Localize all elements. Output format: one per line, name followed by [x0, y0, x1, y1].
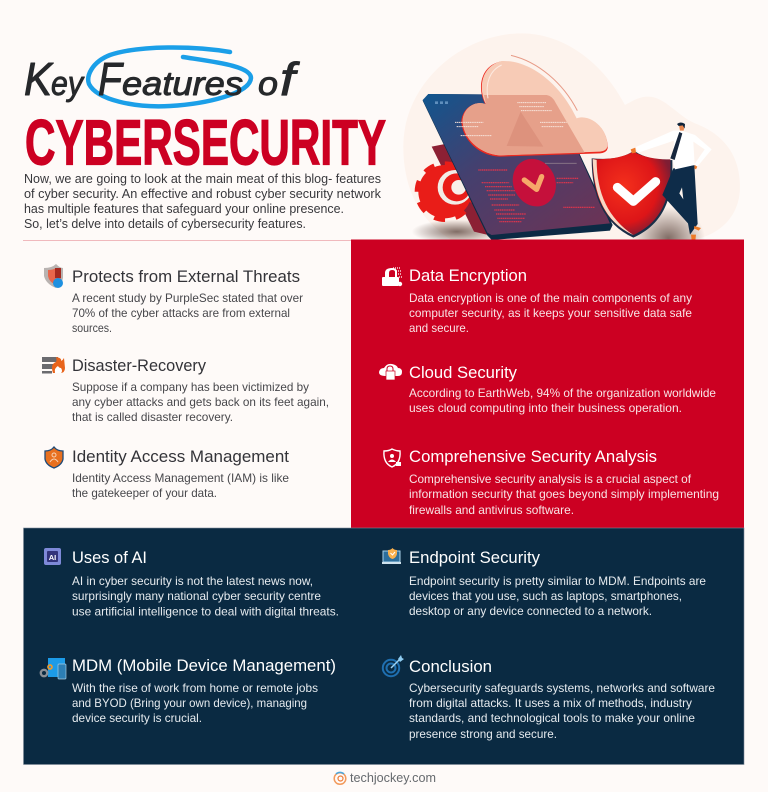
title: CYBERSECURITY: CYBERSECURITY	[25, 106, 386, 178]
section: Protects from External Threats: sources.	[72, 321, 112, 335]
section: Conclusion	[383, 655, 715, 741]
section: Disaster-Recovery: Disaster-Recovery	[72, 356, 206, 375]
icon: shield with globe	[44, 264, 63, 288]
icon: server on fire	[42, 357, 65, 374]
section: Endpoint Security: Endpoint Security	[409, 548, 540, 567]
section: MDM: and BYOD (Bring your own device), managing	[72, 696, 307, 710]
hero illustration: cloud security	[403, 33, 740, 270]
section: Protects from External Threats: Protects from External Threats	[72, 267, 300, 286]
icon: security shield	[384, 449, 401, 467]
section: Endpoint Security	[382, 548, 706, 618]
icon: padlock and data	[382, 268, 402, 286]
title: Key Features of: F	[98, 53, 124, 105]
section: Data Encryption	[382, 266, 692, 335]
section: Endpoint Security: Endpoint security is pretty similar to MDM. Endpoints are	[409, 574, 706, 588]
title: Key Features of: eatures	[122, 65, 243, 102]
section: Comprehensive Security Analysis: information security that goes beyond simply implementing	[409, 487, 719, 501]
section: Conclusion: Conclusion	[409, 657, 492, 676]
intro paragraph: Now, we are going to look at the main meat of this blog- features	[24, 172, 381, 186]
section: MDM: With the rise of work from home or remote jobs	[72, 681, 318, 695]
section: Uses of AI: AI in cyber security is not the latest news now,	[72, 574, 313, 588]
title: Key Features of: ey	[51, 65, 85, 103]
section: Identity Access Management	[45, 447, 289, 500]
section: Comprehensive Security Analysis: firewalls and antivirus software.	[409, 503, 574, 517]
section: MDM: MDM (Mobile Device Management)	[72, 656, 336, 675]
section: Data Encryption: and secure.	[409, 321, 469, 335]
intro paragraph	[24, 172, 382, 231]
section: Disaster-Recovery: Suppose if a company has been victimized by	[72, 380, 309, 394]
icon: techjockey mark	[334, 772, 346, 784]
section: Conclusion: Cybersecurity safeguards systems, networks and software	[409, 681, 715, 695]
background blob	[403, 33, 740, 240]
section: Comprehensive Security Analysis: Comprehensive Security Analysis	[409, 447, 657, 466]
section: Comprehensive Security Analysis	[384, 447, 719, 517]
icon: target and arrow	[383, 655, 404, 676]
section: Data Encryption: computer security, as it keeps your sensitive data safe	[409, 306, 692, 320]
section: Cloud Security	[379, 363, 716, 415]
shield and man	[592, 122, 712, 270]
panel: navy	[24, 528, 744, 764]
tablet body	[423, 94, 613, 240]
icon: laptop with shield	[382, 548, 401, 564]
title: Key Features of	[24, 47, 300, 106]
section: Identity Access Management: the gatekeeper of your data.	[72, 486, 217, 500]
divider line	[23, 240, 353, 241]
highlight ellipse around Features	[88, 47, 251, 106]
icon: AI chip	[44, 548, 61, 565]
section: Identity Access Management: Identity Access Management (IAM) is like	[72, 471, 289, 485]
icon: cloud padlock	[379, 364, 402, 380]
tablet code lines	[478, 170, 595, 222]
section: Conclusion: presence strong and secure.	[409, 727, 557, 741]
section: Data Encryption: Data encryption is one of the main components of any	[409, 291, 692, 305]
title: Key Features of: o	[258, 65, 278, 102]
section: Disaster-Recovery: any cyber attacks and gets back on its feet again,	[72, 395, 329, 409]
section: Conclusion: standards, and technological tools to make your online	[409, 711, 695, 725]
icon: devices and gears	[41, 658, 66, 679]
section: Disaster-Recovery: that is called disaster recovery.	[72, 410, 233, 424]
cloud	[461, 62, 608, 157]
section: Uses of AI: Uses of AI	[72, 548, 147, 567]
section: Cloud Security: According to EarthWeb, 94% of the organization worldwide	[409, 386, 716, 400]
section: Conclusion: from digital attacks. It uses a mix of methods, industry	[409, 696, 692, 710]
section: MDM	[41, 656, 336, 725]
section: Uses of AI: surprisingly many national cyber security centre	[72, 589, 321, 603]
section: Cloud Security: Cloud Security	[409, 363, 517, 382]
title: Key Features of: f	[280, 53, 300, 105]
gear	[417, 164, 473, 219]
title: Key Features of: K	[24, 53, 54, 105]
badge with check	[505, 152, 564, 214]
section: MDM: device security is crucial.	[72, 711, 202, 725]
icon: identity shield	[45, 447, 63, 468]
section: Protects from External Threats: A recent study by PurpleSec stated that over	[72, 291, 303, 305]
tablet, gear and cloud	[412, 55, 613, 244]
section: Disaster-Recovery	[42, 356, 329, 424]
intro paragraph: has multiple features that safeguard your online presence.	[24, 202, 344, 216]
section: Cloud Security: uses cloud computing into their business operation.	[409, 401, 682, 415]
man	[662, 165, 698, 235]
intro paragraph: So, let’s delve into details of cybersecurity features.	[24, 217, 306, 231]
section: Identity Access Management: Identity Access Management	[72, 447, 289, 466]
section: Protects from External Threats: 70% of the cyber attacks are from external	[72, 306, 290, 320]
section: Endpoint Security: devices that you use, such as laptops, smartphones,	[409, 589, 682, 603]
icon: AI chip: AI	[49, 553, 56, 562]
section: Data Encryption: Data Encryption	[409, 266, 527, 285]
section: Protects from External Threats	[44, 264, 303, 335]
section: Comprehensive Security Analysis: Comprehensive security analysis is a crucial aspect of	[409, 472, 692, 486]
shield	[592, 151, 672, 238]
panel: red	[351, 240, 744, 528]
section: Uses of AI	[44, 548, 339, 618]
intro paragraph: of cyber security. An effective and robust cyber security network	[24, 187, 382, 201]
section: Endpoint Security: desktop or any device connected to a network.	[409, 604, 652, 618]
footer logo: techjockey.com: techjockey.com	[350, 771, 436, 785]
section: Uses of AI: use artificial intelligence to deal with digital threats.	[72, 604, 339, 618]
